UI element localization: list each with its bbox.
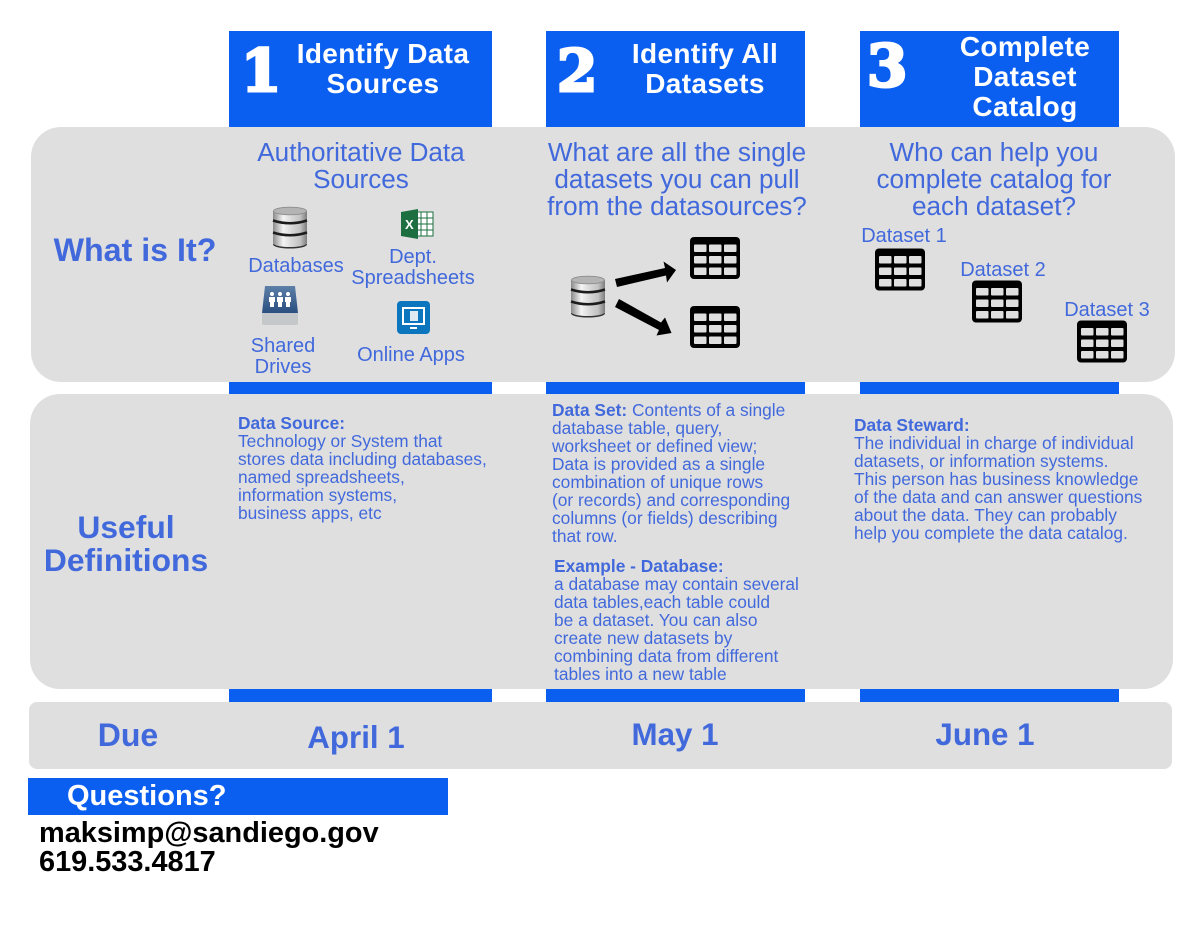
step 2 heading: Identify All: [632, 38, 778, 69]
column band: step 1: [229, 31, 492, 703]
label: dataset 1: Dataset 1: [861, 225, 947, 247]
definition: data set: Data is provided as a single: [552, 454, 765, 474]
definition: example database: tables into a new table: [554, 664, 727, 684]
step 2 number: 2: [557, 37, 597, 105]
label: shared drives: Shared: [251, 335, 315, 357]
label: dept spreadsheets: Dept.: [389, 246, 437, 268]
icon: upper table: [690, 237, 740, 279]
column 1 subheading: Sources: [313, 164, 409, 194]
arrow: to upper table: [615, 262, 676, 287]
arrow: to lower table: [615, 299, 672, 336]
column 2 subheading: from the datasources?: [547, 191, 807, 221]
panel: useful definitions: [30, 394, 1173, 689]
contact details: [39, 817, 379, 878]
definition: data set: that row.: [552, 526, 618, 546]
icon: lower table: [690, 306, 740, 348]
definition: data source: business apps, etc: [238, 503, 382, 523]
column 3 subheading: [876, 137, 1111, 221]
column 1 subheading: [257, 137, 465, 194]
icon: online apps: [397, 301, 430, 334]
icon: excel spreadsheet: X: [405, 217, 414, 232]
column 3 subheading: complete catalog for: [876, 164, 1111, 194]
definition: data source: named spreadsheets,: [238, 467, 405, 487]
step 1 heading: Sources: [327, 68, 439, 99]
definition: data steward: [854, 415, 1142, 543]
step 3 number: 3: [867, 32, 907, 100]
column band: step 2: [546, 31, 805, 703]
step 3 heading: Dataset: [973, 61, 1077, 92]
diagram: database to two tables: [570, 237, 740, 348]
definition: example database: Example - Database:: [554, 556, 724, 576]
definition: data set: database table, query,: [552, 418, 722, 438]
label: databases: Databases: [248, 255, 344, 277]
row heading: useful definitions: Definitions: [44, 542, 208, 578]
contact details: maksimp@sandiego.gov: [39, 817, 379, 849]
definition: data source: information systems,: [238, 485, 397, 505]
label: shared drives: Drives: [255, 356, 311, 378]
due date: may 1: May 1: [632, 717, 718, 752]
panel: due dates: [29, 702, 1172, 769]
column 2 subheading: [547, 137, 807, 221]
label: shared drives: [251, 335, 315, 378]
definition: data source: Technology or System that: [238, 431, 442, 451]
definition: data source: stores data including databases,: [238, 449, 487, 469]
icon: database source: [571, 276, 605, 318]
step 2 heading: [632, 38, 778, 99]
step 3 heading: Complete: [960, 31, 1090, 62]
due date: june 1: June 1: [935, 717, 1035, 752]
questions banner: Questions?: [67, 780, 227, 812]
step 1 heading: Identify Data: [297, 38, 469, 69]
column 3 subheading: each dataset?: [912, 191, 1076, 221]
icon: excel spreadsheet: [401, 209, 434, 239]
step 2 heading: Datasets: [645, 68, 765, 99]
step 3 heading: [960, 31, 1090, 122]
column 2 subheading: datasets you can pull: [554, 164, 800, 194]
step 1 heading: [297, 38, 470, 99]
contact details: 619.533.4817: [39, 846, 216, 878]
row heading: useful definitions: [44, 509, 208, 578]
label: dataset 2: Dataset 2: [960, 259, 1046, 281]
definition: data steward: This person has business knowledge: [854, 469, 1138, 489]
row heading: what is it: What is It?: [54, 232, 216, 268]
column 1 subheading: Authoritative Data: [257, 137, 465, 167]
definition: data source: [238, 413, 487, 523]
row heading: due: Due: [98, 717, 158, 753]
questions banner: [28, 778, 448, 815]
definition: example database: data tables,each table could: [554, 592, 770, 612]
definition: data set: (or records) and corresponding: [552, 490, 790, 510]
definition: data set: Data Set: Contents of a single: [552, 400, 785, 420]
definition: example database: [554, 556, 799, 684]
due date: april 1: April 1: [307, 720, 405, 755]
definition: data set: worksheet or defined view;: [552, 436, 757, 456]
label: dataset 3: Dataset 3: [1064, 299, 1150, 321]
column 3 subheading: Who can help you: [890, 137, 1098, 167]
icon: shared drive: [262, 286, 298, 325]
icon: database: [272, 206, 308, 248]
label: dept spreadsheets: [351, 246, 475, 289]
icon: dataset 3 table: [1077, 320, 1127, 362]
definition: data steward: datasets, or information systems.: [854, 451, 1108, 471]
column 2 subheading: What are all the single: [548, 137, 806, 167]
definition: example database: a database may contain several: [554, 574, 799, 594]
definition: data set: columns (or fields) describing: [552, 508, 778, 528]
column band: step 3: [860, 31, 1119, 703]
definition: data steward: about the data. They can probably: [854, 505, 1117, 525]
definition: data set: combination of unique rows: [552, 472, 763, 492]
definition: data steward: The individual in charge of individual: [854, 433, 1134, 453]
definition: example database: combining data from different: [554, 646, 778, 666]
panel: what is it: [31, 127, 1175, 382]
icon: dataset 2 table: [972, 280, 1022, 322]
icon: dataset 1 table: [875, 248, 925, 290]
step 3 heading: Catalog: [972, 91, 1078, 122]
label: dept spreadsheets: Spreadsheets: [351, 267, 475, 289]
definition: example database: be a dataset. You can also: [554, 610, 757, 630]
row heading: useful definitions: Useful: [77, 509, 175, 545]
step 1 number: 1: [241, 37, 281, 105]
definition: data set: [552, 400, 790, 546]
definition: example database: create new datasets by: [554, 628, 732, 648]
definition: data steward: Data Steward:: [854, 415, 970, 435]
definition: data steward: of the data and can answer questions: [854, 487, 1142, 507]
label: online apps: Online Apps: [357, 344, 465, 366]
definition: data steward: help you complete the data catalog.: [854, 523, 1128, 543]
definition: data source: Data Source:: [238, 413, 345, 433]
